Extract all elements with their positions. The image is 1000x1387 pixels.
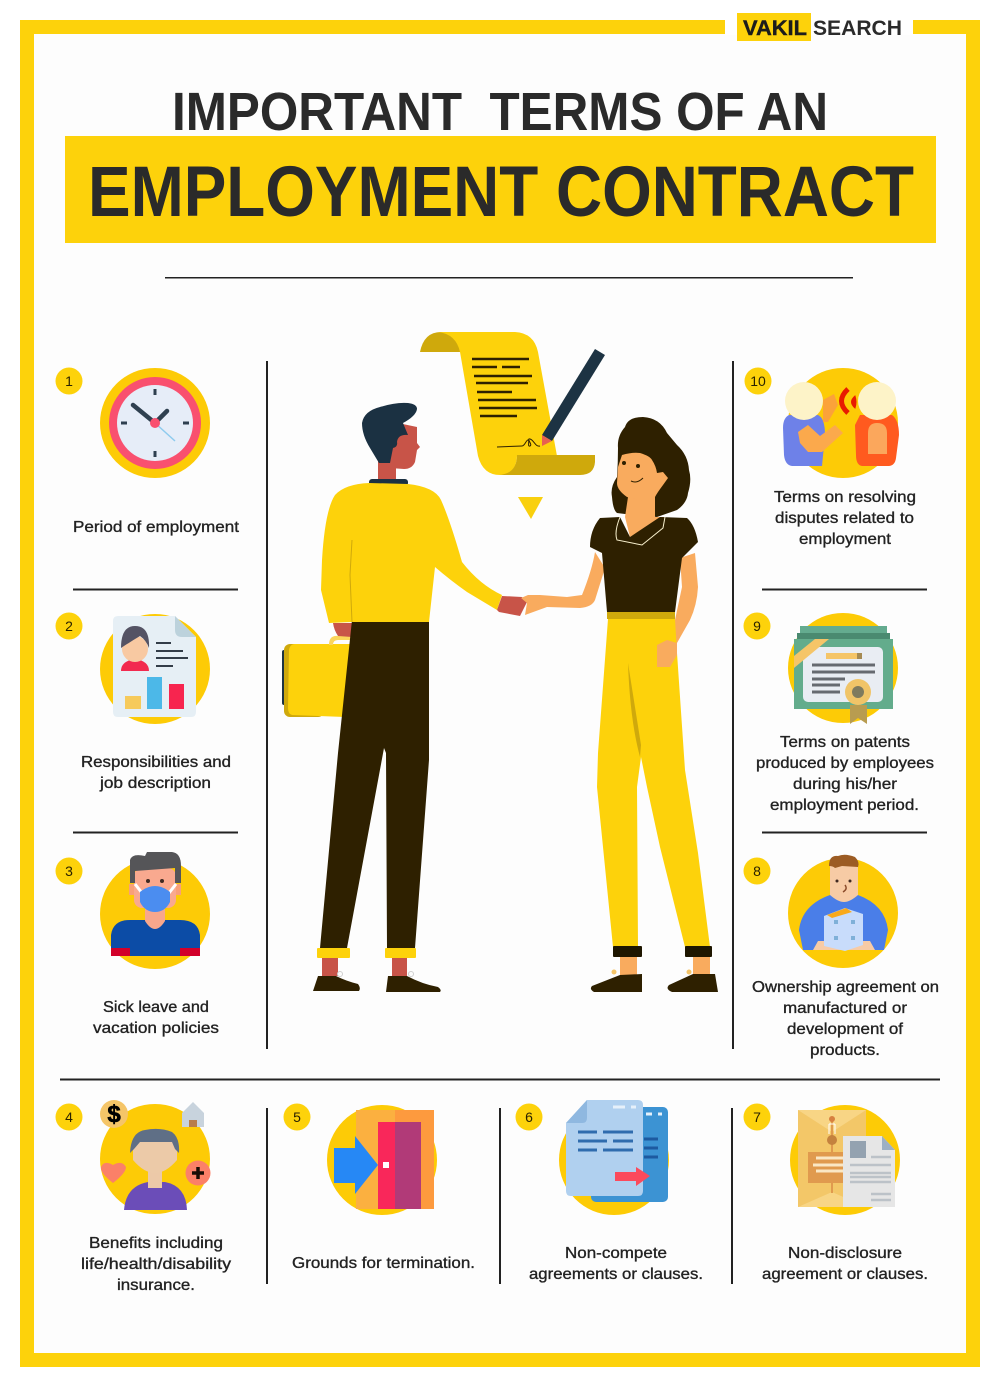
label 3: vacation policies [93,1020,219,1037]
number badge 9: 9 [753,618,761,634]
arrow [518,497,543,519]
icon: documents [559,1100,669,1215]
icon: man holding building [788,855,898,968]
number badge 8: 8 [753,863,761,879]
item 2: responsibilities [56,612,231,792]
label 9: during his/her [793,776,898,793]
label 8: Ownership agreement on [752,979,939,996]
label 2: job description [99,775,211,792]
number badge 3: 3 [65,863,73,879]
label 3 [93,999,219,1037]
item 7: non-disclosure [744,1104,928,1283]
number badge 9 [744,612,770,640]
title banner: EMPLOYMENT CONTRACT [88,153,914,232]
label 10 [774,489,916,548]
icon: clock [100,368,210,478]
label 7: Non-disclosure [788,1245,902,1262]
briefcase [282,636,352,717]
label 8 [752,979,939,1059]
label 7 [762,1245,928,1283]
label 9: employment period. [770,797,919,814]
label 6: Non-compete [565,1245,667,1262]
contract scroll [420,332,595,475]
label 5: Grounds for termination. [292,1255,475,1272]
logo: Vakil Search: SEARCH [813,17,902,40]
item 8: ownership agreement [744,855,939,1059]
label 2: Responsibilities and [81,754,231,771]
number badge 2: 2 [65,618,73,634]
number badge 6 [516,1104,542,1130]
title: IMPORTANT TERMS OF AN [172,82,828,142]
label 6: agreements or clauses. [529,1266,703,1283]
number badge 3 [56,858,82,884]
icon: person with mask [100,852,210,969]
pen [542,349,605,446]
item 9: patents [744,612,934,814]
label 4 [81,1235,231,1294]
label 8: products. [810,1042,880,1059]
label 9: produced by employees [756,755,934,772]
central illustration: handshake with contract [282,332,718,992]
number badge 10 [744,368,772,394]
label 9: Terms on patents [780,734,910,751]
logo: Vakil Search [737,13,902,41]
number badge 7 [744,1104,770,1130]
logo: Vakil Search: VAKIL [743,17,807,40]
number badge 8 [744,858,770,884]
icon: two people in dispute [783,368,899,478]
label 8: manufactured or [783,1000,908,1017]
item 6: non-compete [516,1100,703,1283]
icon: exit door [327,1105,437,1215]
man [282,403,527,992]
number badge 5 [284,1104,310,1130]
label 3: Sick leave and [103,999,209,1016]
label 10: Terms on resolving [774,489,916,506]
number badge 5: 5 [293,1109,301,1125]
icon: benefits person: $ [107,1101,121,1128]
icon: envelope with paper [790,1105,900,1215]
label 4: insurance. [117,1277,195,1294]
item 4: benefits [56,1100,231,1294]
title banner [65,136,936,243]
number badge 10: 10 [750,373,766,389]
item 1: period of employment [56,368,240,536]
number badge 4 [56,1104,82,1130]
number badge 6: 6 [525,1109,533,1125]
label 1: Period of employment [73,519,240,536]
woman [521,417,718,992]
item 3: sick leave [56,852,219,1037]
label 9 [756,734,934,814]
number badge 1: 1 [65,373,73,389]
label 2 [81,754,231,792]
icon: job description [100,614,210,724]
icon: certificate [788,613,898,724]
number badge 7: 7 [753,1109,761,1125]
label 4: Benefits including [89,1235,223,1252]
icon: benefits person [100,1100,210,1214]
number badge 4: 4 [65,1109,73,1125]
label 10: employment [799,531,892,548]
number badge 1 [56,368,82,394]
number badge 2 [56,612,82,640]
label 6 [529,1245,703,1283]
label 10: disputes related to [775,510,914,527]
label 7: agreement or clauses. [762,1266,928,1283]
label 8: development of [787,1021,904,1038]
label 4: life/health/disability [81,1256,231,1273]
item 5: termination [284,1104,475,1272]
item 10: disputes [744,368,916,548]
